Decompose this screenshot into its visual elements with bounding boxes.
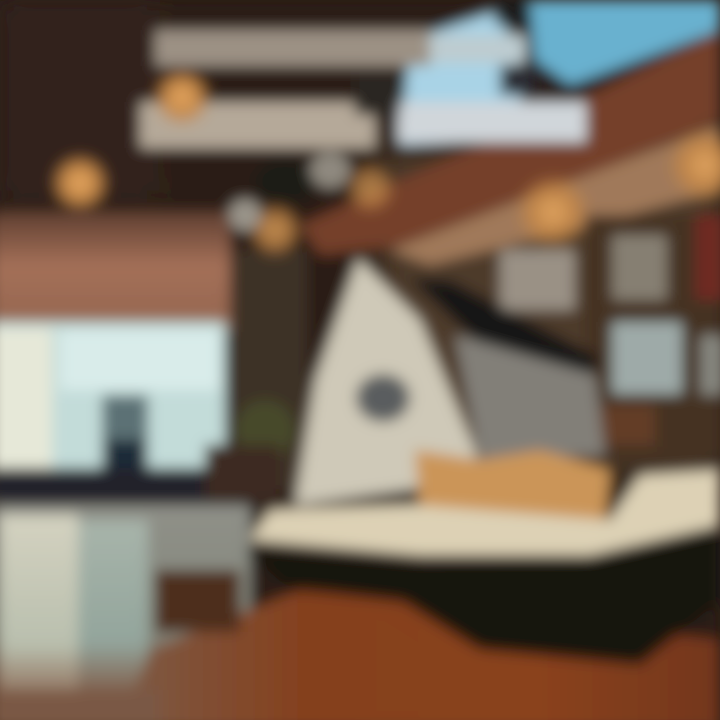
dark ceiling details — [229, 75, 400, 231]
reflective floor left — [0, 505, 250, 700]
house round window — [356, 374, 410, 422]
orange block on counter — [415, 450, 610, 520]
bright window — [0, 322, 225, 475]
blurred heading line two — [140, 102, 375, 148]
house side wall — [455, 335, 605, 460]
ceiling lamps — [50, 67, 720, 258]
small wooden box — [155, 570, 240, 632]
wood floor — [120, 590, 720, 720]
title placeholder bars, blurred — [140, 30, 586, 148]
house model — [295, 258, 610, 520]
blurred heading line one — [155, 30, 430, 66]
blurred heading line three — [398, 102, 586, 142]
counter dark base — [245, 530, 720, 665]
counter top — [250, 470, 720, 555]
dark column and plant — [205, 250, 307, 500]
house front gable — [295, 258, 480, 505]
sky through skylight — [400, 0, 720, 145]
house roof — [410, 278, 600, 378]
dark band below window — [0, 468, 250, 502]
shelves on the right — [500, 215, 720, 455]
wooden roof beam — [300, 30, 720, 265]
wood panel wall — [0, 212, 230, 332]
